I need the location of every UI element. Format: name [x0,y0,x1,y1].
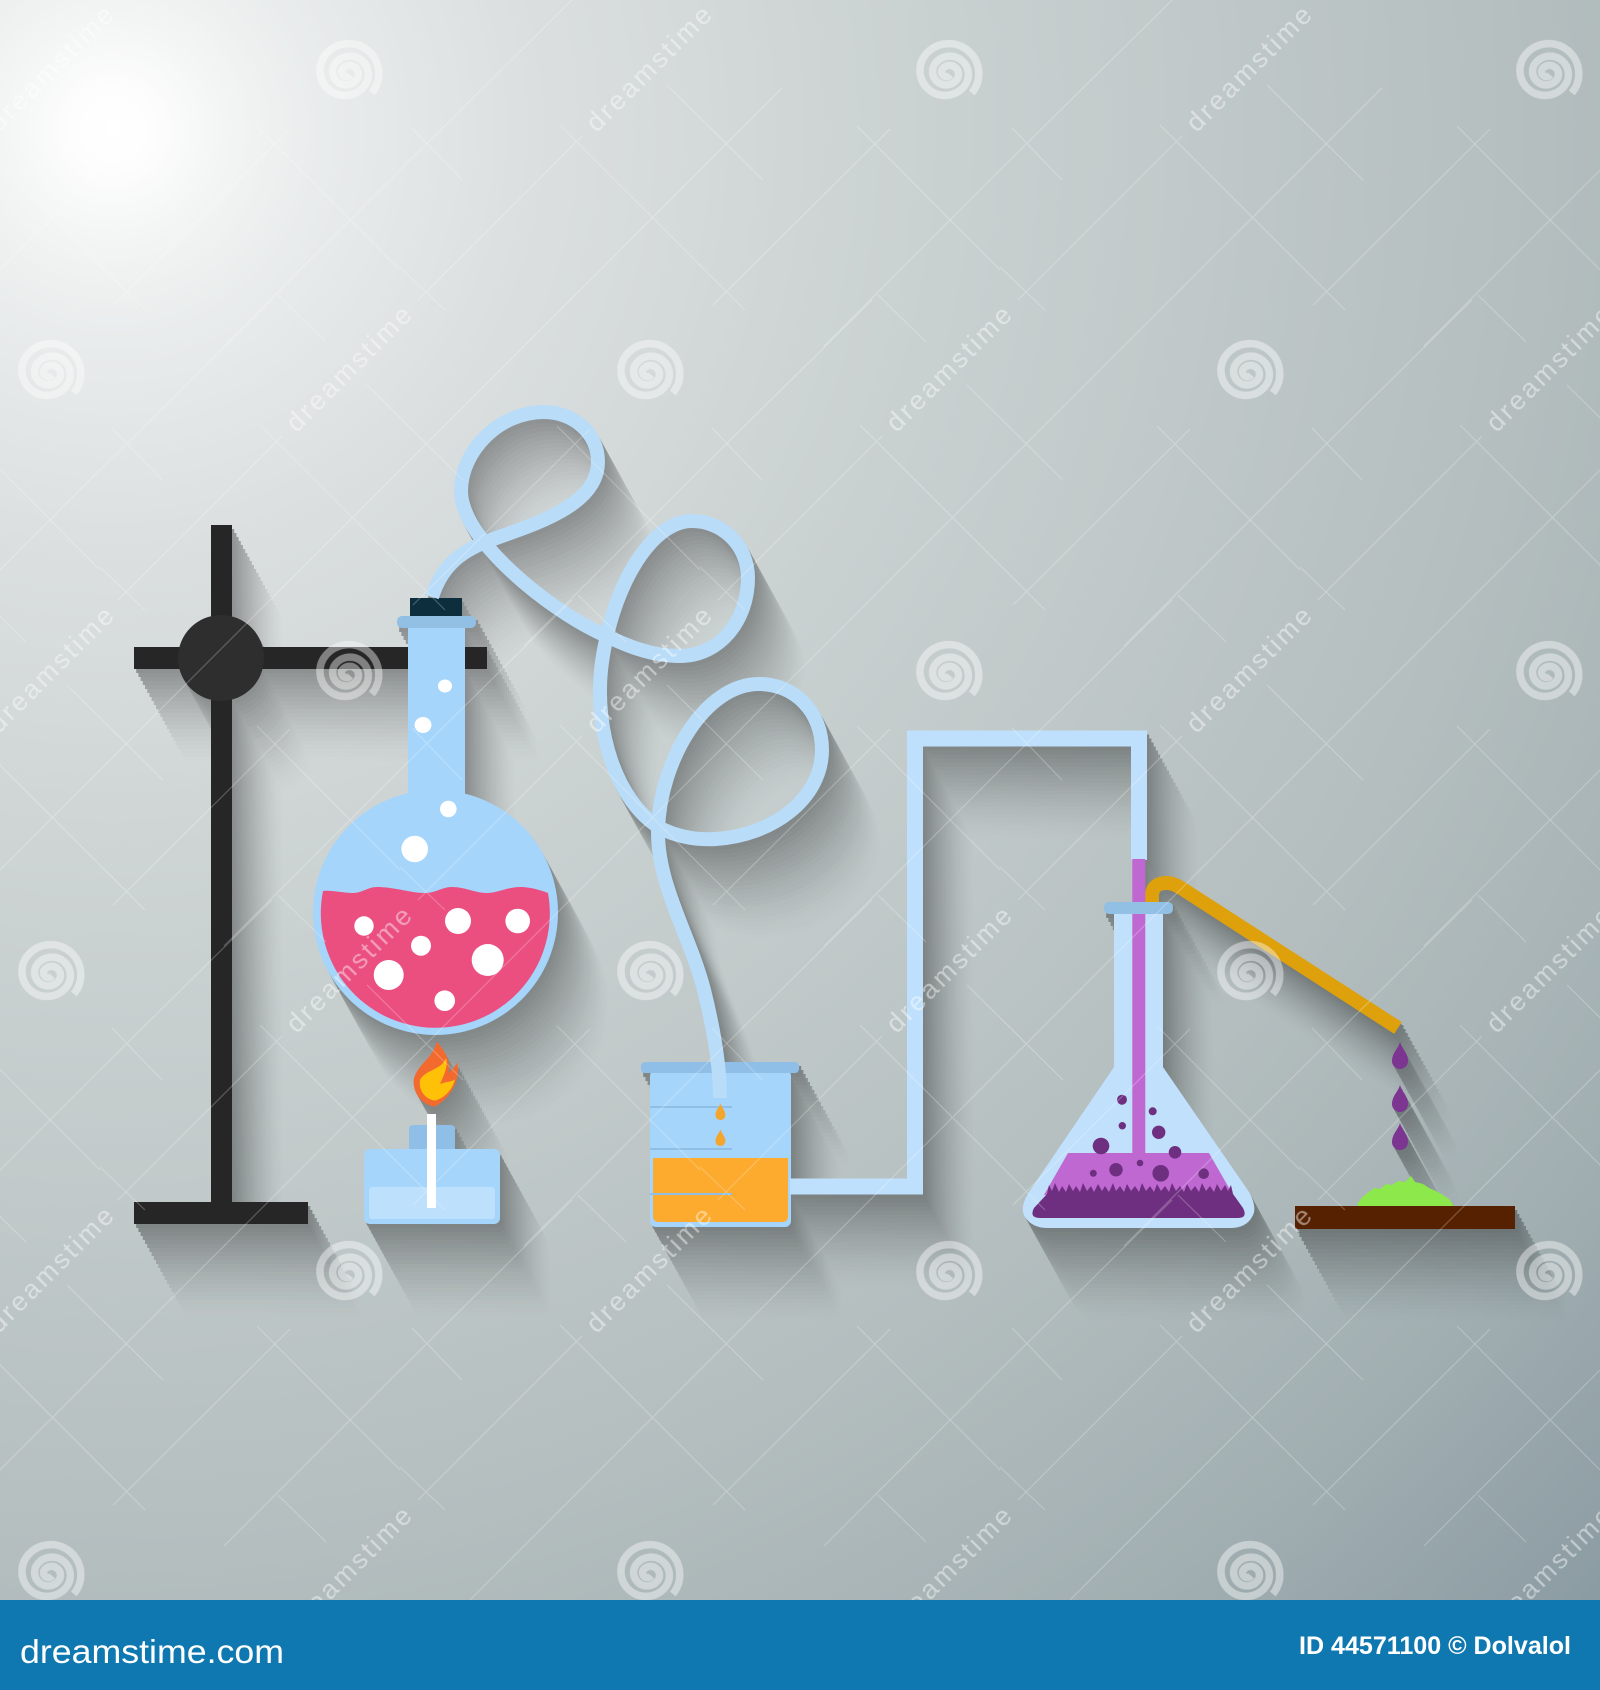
beaker [641,1062,799,1227]
flask lip [1104,902,1173,914]
flask stopper [410,598,462,617]
square connecting tube [790,738,1139,1186]
watermark text: dreamstime [1180,1201,1318,1339]
footer credit: ID 44571100 © Dolvalol [1299,1632,1571,1660]
gold side-arm tube [1152,883,1398,1028]
light purple liquid [1044,1153,1233,1195]
pink liquid [321,887,550,1028]
brown shelf [1295,1206,1515,1229]
watermark text: dreamstime [580,601,718,739]
conical flask [1023,859,1254,1228]
green powder [1357,1176,1454,1206]
watermark text: dreamstime [1180,0,1318,138]
watermark text: dreamstime [880,1501,1018,1639]
purple bubbles [1090,1095,1209,1182]
watermark text: dreamstime [280,901,418,1039]
spirit burner [364,1114,500,1224]
watermark text: dreamstime [280,1501,418,1639]
watermark text: dreamstime [580,1201,718,1339]
purple drops [1392,1042,1408,1150]
purple inner tube [1132,859,1145,1154]
orange drips [715,1103,725,1146]
retort stand [134,525,487,1224]
watermark text: dreamstime [580,0,718,138]
watermark text: dreamstime [880,901,1018,1039]
round bottom flask [313,598,558,1035]
dark purple sediment [1032,1183,1245,1218]
flask lip [397,616,476,628]
coiled glass tube [432,412,822,1098]
watermark text: dreamstime [880,300,1018,438]
footer logo text: dreamstime.com [20,1633,284,1670]
watermark text: dreamstime [280,300,418,438]
watermark text: dreamstime [1180,601,1318,739]
orange liquid [653,1158,788,1222]
icon: flame [414,1042,458,1107]
flask bubbles [354,680,530,1011]
footer banner [0,1600,1600,1690]
